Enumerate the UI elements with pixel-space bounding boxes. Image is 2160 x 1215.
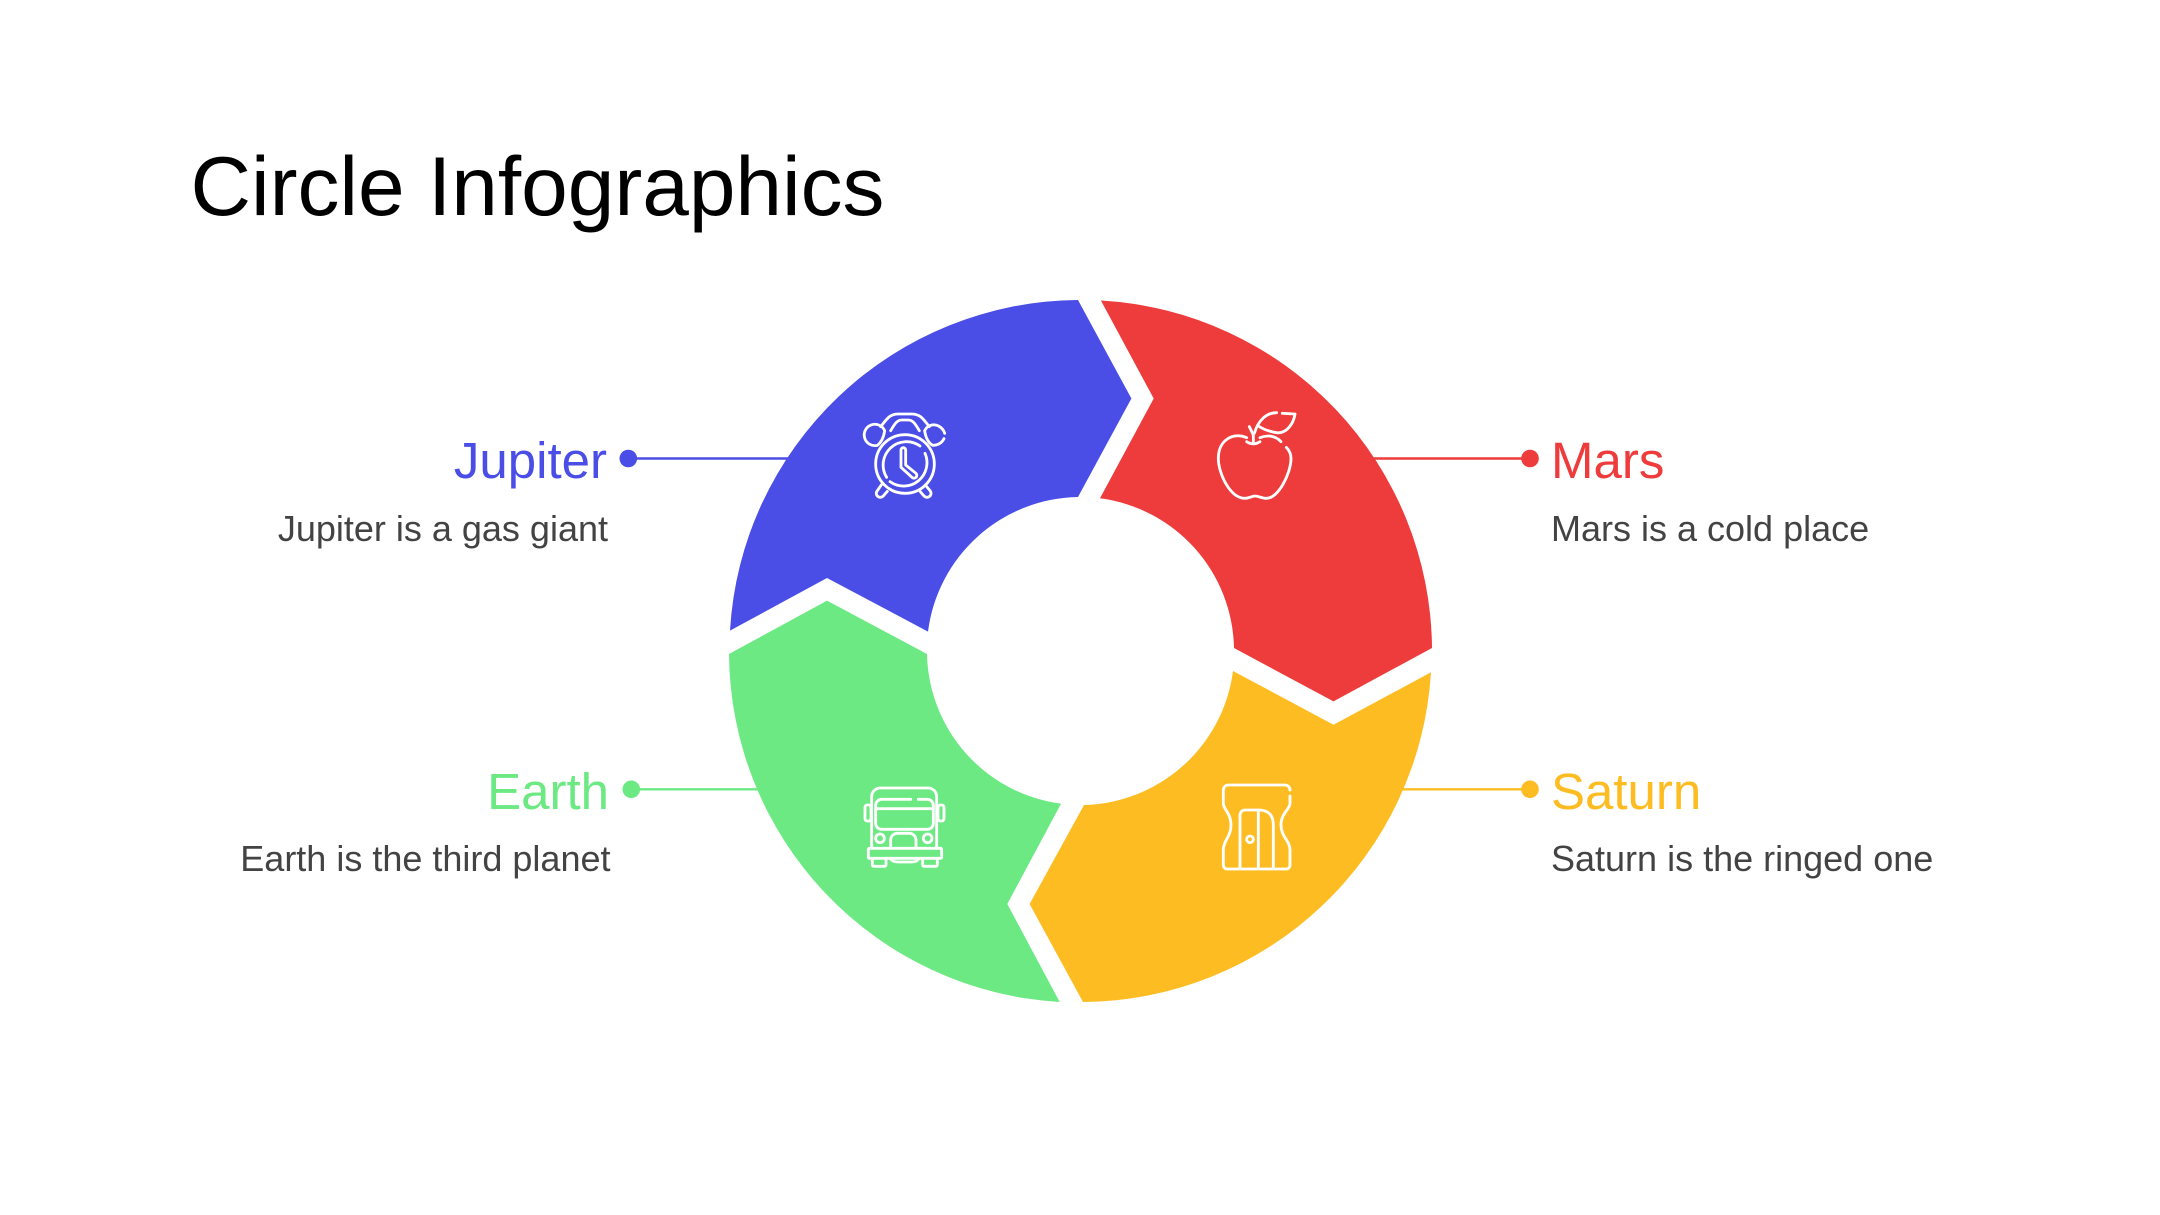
label: Saturn: Saturn is the ringed one — [1551, 838, 1933, 879]
icon: school bus — [865, 788, 944, 866]
icon: apple — [1218, 413, 1295, 498]
connector: Jupiter — [620, 450, 800, 467]
label: Saturn — [1551, 763, 1933, 879]
connector: Mars — [1370, 450, 1539, 467]
label: Mars: Mars is a cold place — [1551, 508, 1869, 549]
label: Jupiter: Jupiter is a gas giant — [278, 508, 608, 549]
segment: Earth (green) — [729, 601, 1061, 1002]
label: Jupiter — [278, 432, 608, 549]
icon: pencil sharpener — [1223, 785, 1290, 869]
segment: Mars (red) — [1100, 300, 1432, 701]
connector: Earth — [622, 780, 775, 798]
label: Earth: Earth — [487, 763, 609, 820]
title: Circle Infographics — [190, 139, 884, 233]
label: Earth — [240, 763, 610, 879]
segment: Jupiter (blue) — [730, 300, 1131, 632]
label: Saturn: Saturn — [1551, 763, 1701, 820]
label: Earth: Earth is the third planet — [240, 838, 610, 879]
icon: alarm clock — [864, 414, 945, 497]
label: Jupiter: Jupiter — [454, 432, 607, 489]
label: Mars — [1551, 432, 1869, 549]
label: Mars: Mars — [1551, 432, 1664, 489]
segment: Saturn (yellow) — [1030, 671, 1431, 1002]
connector: Saturn — [1395, 780, 1539, 798]
